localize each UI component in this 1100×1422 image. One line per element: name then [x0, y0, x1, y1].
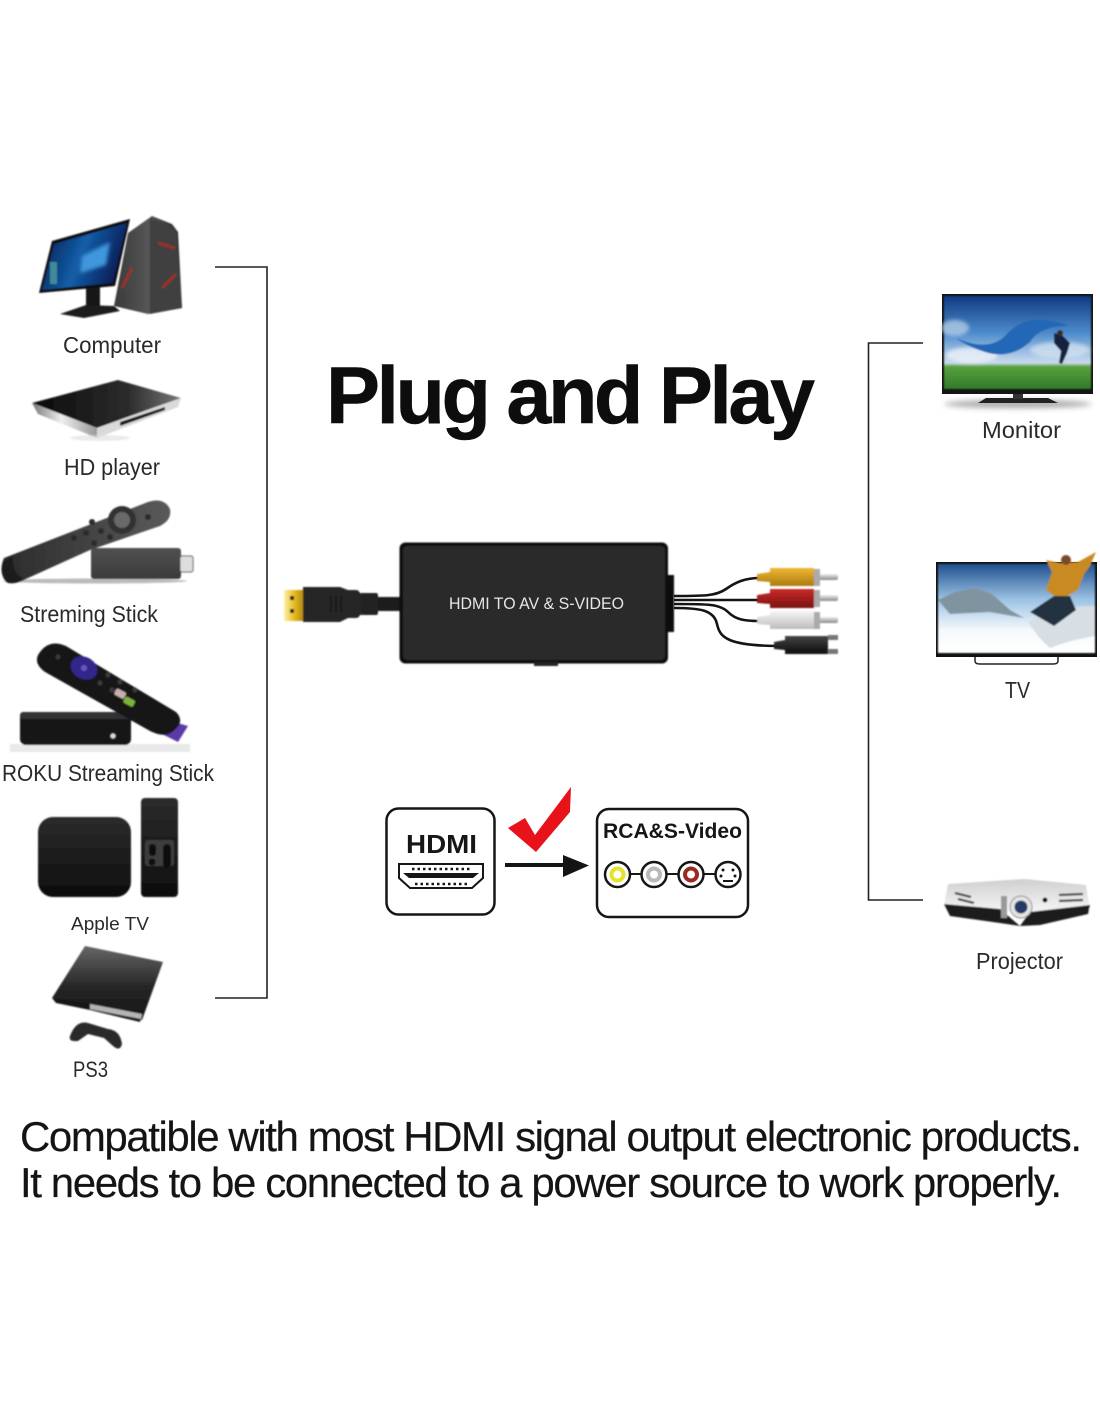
icon: projector: [944, 879, 1090, 926]
icon: HD player: [32, 380, 181, 441]
icon: ROKU streaming stick: [10, 643, 190, 752]
icon: computer: [39, 216, 182, 318]
title: Plug and Play: [326, 351, 815, 441]
label: Streming Stick: Streming Stick: [20, 601, 158, 627]
label: PS3: PS3: [73, 1057, 108, 1082]
caption line 1: Compatible with most HDMI signal output electronic products.: [20, 1113, 1082, 1160]
label: Monitor: Monitor: [982, 417, 1061, 443]
label: Apple TV: Apple TV: [71, 914, 149, 934]
label: HD player: HD player: [64, 454, 160, 480]
adapter box: [400, 542, 674, 666]
icon: RCA & S-Video box: [597, 809, 748, 917]
icon: PS3: [52, 946, 163, 1049]
RCA heading: RCA&S-Video: [603, 820, 742, 843]
HDMI port glyph: [399, 864, 483, 888]
HDMI heading: HDMI: [406, 829, 477, 859]
label: TV: TV: [1005, 677, 1031, 703]
icon: HDMI box: [386, 808, 494, 914]
adapter label: HDMI TO AV & S-VIDEO: [449, 595, 624, 613]
bracket: display devices: [868, 343, 923, 900]
bracket: source devices: [215, 267, 267, 998]
label: ROKU Streaming Stick: ROKU Streaming Stick: [2, 760, 214, 786]
output cables: [674, 578, 782, 646]
label: Projector: Projector: [976, 948, 1063, 974]
connector row: [605, 862, 740, 887]
icon: red check mark: [508, 787, 571, 852]
icon: Apple TV: [38, 798, 178, 897]
label: Computer: Computer: [63, 332, 161, 358]
icon: monitor: [941, 294, 1093, 408]
arrow: [505, 855, 589, 877]
adapter device: [284, 542, 838, 666]
RCA connectors: [757, 568, 838, 654]
HDMI plug and cable: [284, 587, 402, 622]
icon: streaming stick: [1, 501, 193, 584]
icon: TV: [936, 552, 1097, 664]
caption text: [20, 1113, 1082, 1206]
caption line 2: It needs to be connected to a power source to work properly.: [20, 1159, 1062, 1206]
